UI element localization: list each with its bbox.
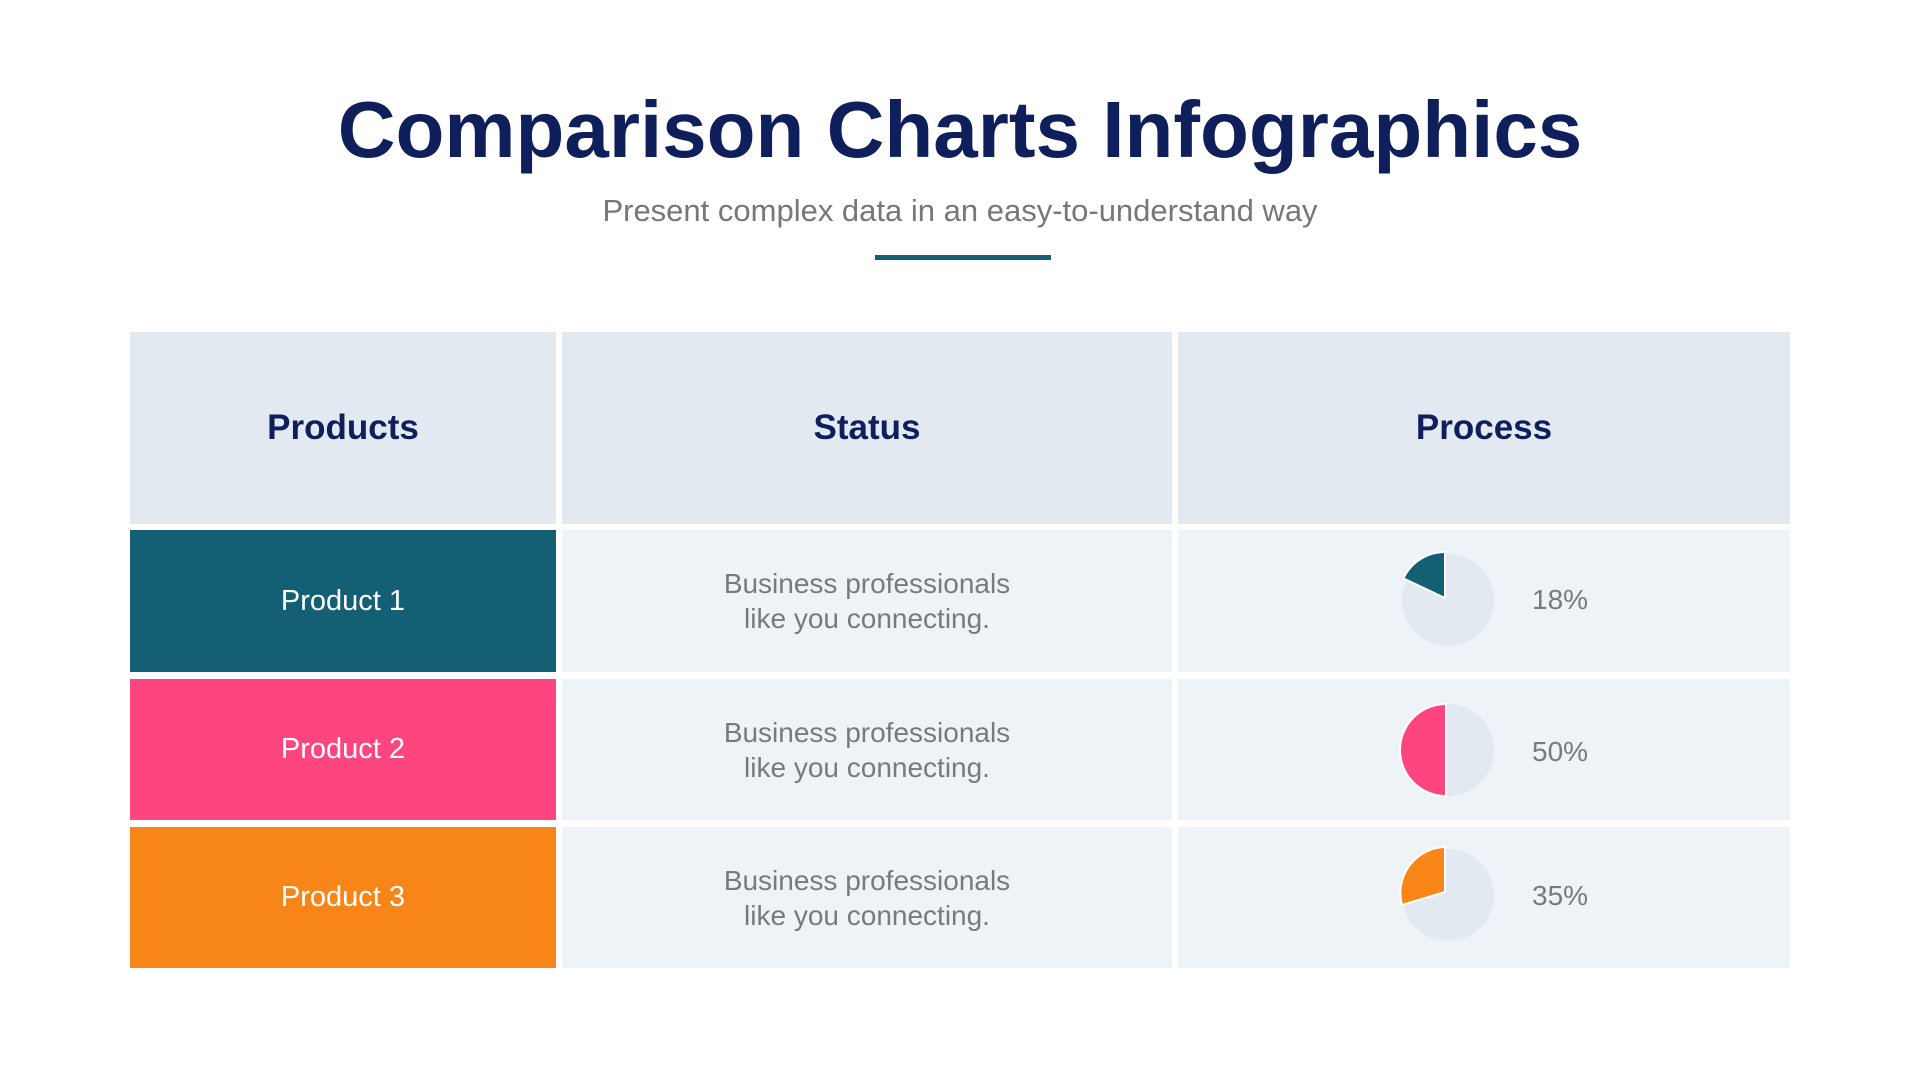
row 1 product: Product 1 (281, 584, 405, 616)
table (130, 332, 1790, 968)
header: Products: Products (267, 408, 419, 447)
row 3 status (562, 827, 1172, 968)
row 1 product (130, 530, 556, 672)
row 2 status: like you connecting. (744, 752, 990, 782)
header: Status (562, 332, 1172, 524)
row 2 product: Product 2 (281, 733, 405, 765)
row 3 product (130, 827, 556, 968)
row 2 product (130, 679, 556, 820)
label 35%: 35% (1532, 880, 1588, 911)
row 2 process (1178, 679, 1790, 820)
row 1 status (562, 530, 1172, 672)
row 2 status (562, 679, 1172, 820)
header: Products (130, 332, 556, 524)
header: Process: Process (1416, 408, 1552, 447)
row 2 status: Business professionals (724, 716, 1010, 748)
pie 50% (1399, 703, 1494, 797)
label 18%: 18% (1532, 584, 1588, 615)
row 1 process (1178, 530, 1790, 672)
row 1 status: like you connecting. (744, 603, 990, 634)
label 50%: 50% (1532, 736, 1588, 767)
title: Comparison Charts Infographics (338, 85, 1582, 174)
pie 18% (1402, 551, 1494, 646)
divider line (875, 255, 1051, 260)
row 1 status: Business professionals (724, 568, 1010, 599)
header: Status: Status (814, 408, 920, 447)
row 3 status: like you connecting. (744, 900, 990, 930)
row 3 process (1178, 827, 1790, 968)
header: Process (1178, 332, 1790, 524)
subtitle: Present complex data in an easy-to-understand way (602, 193, 1318, 228)
pie 35% (1400, 846, 1494, 941)
row 3 status: Business professionals (724, 864, 1010, 896)
row 3 product: Product 3 (281, 881, 405, 913)
